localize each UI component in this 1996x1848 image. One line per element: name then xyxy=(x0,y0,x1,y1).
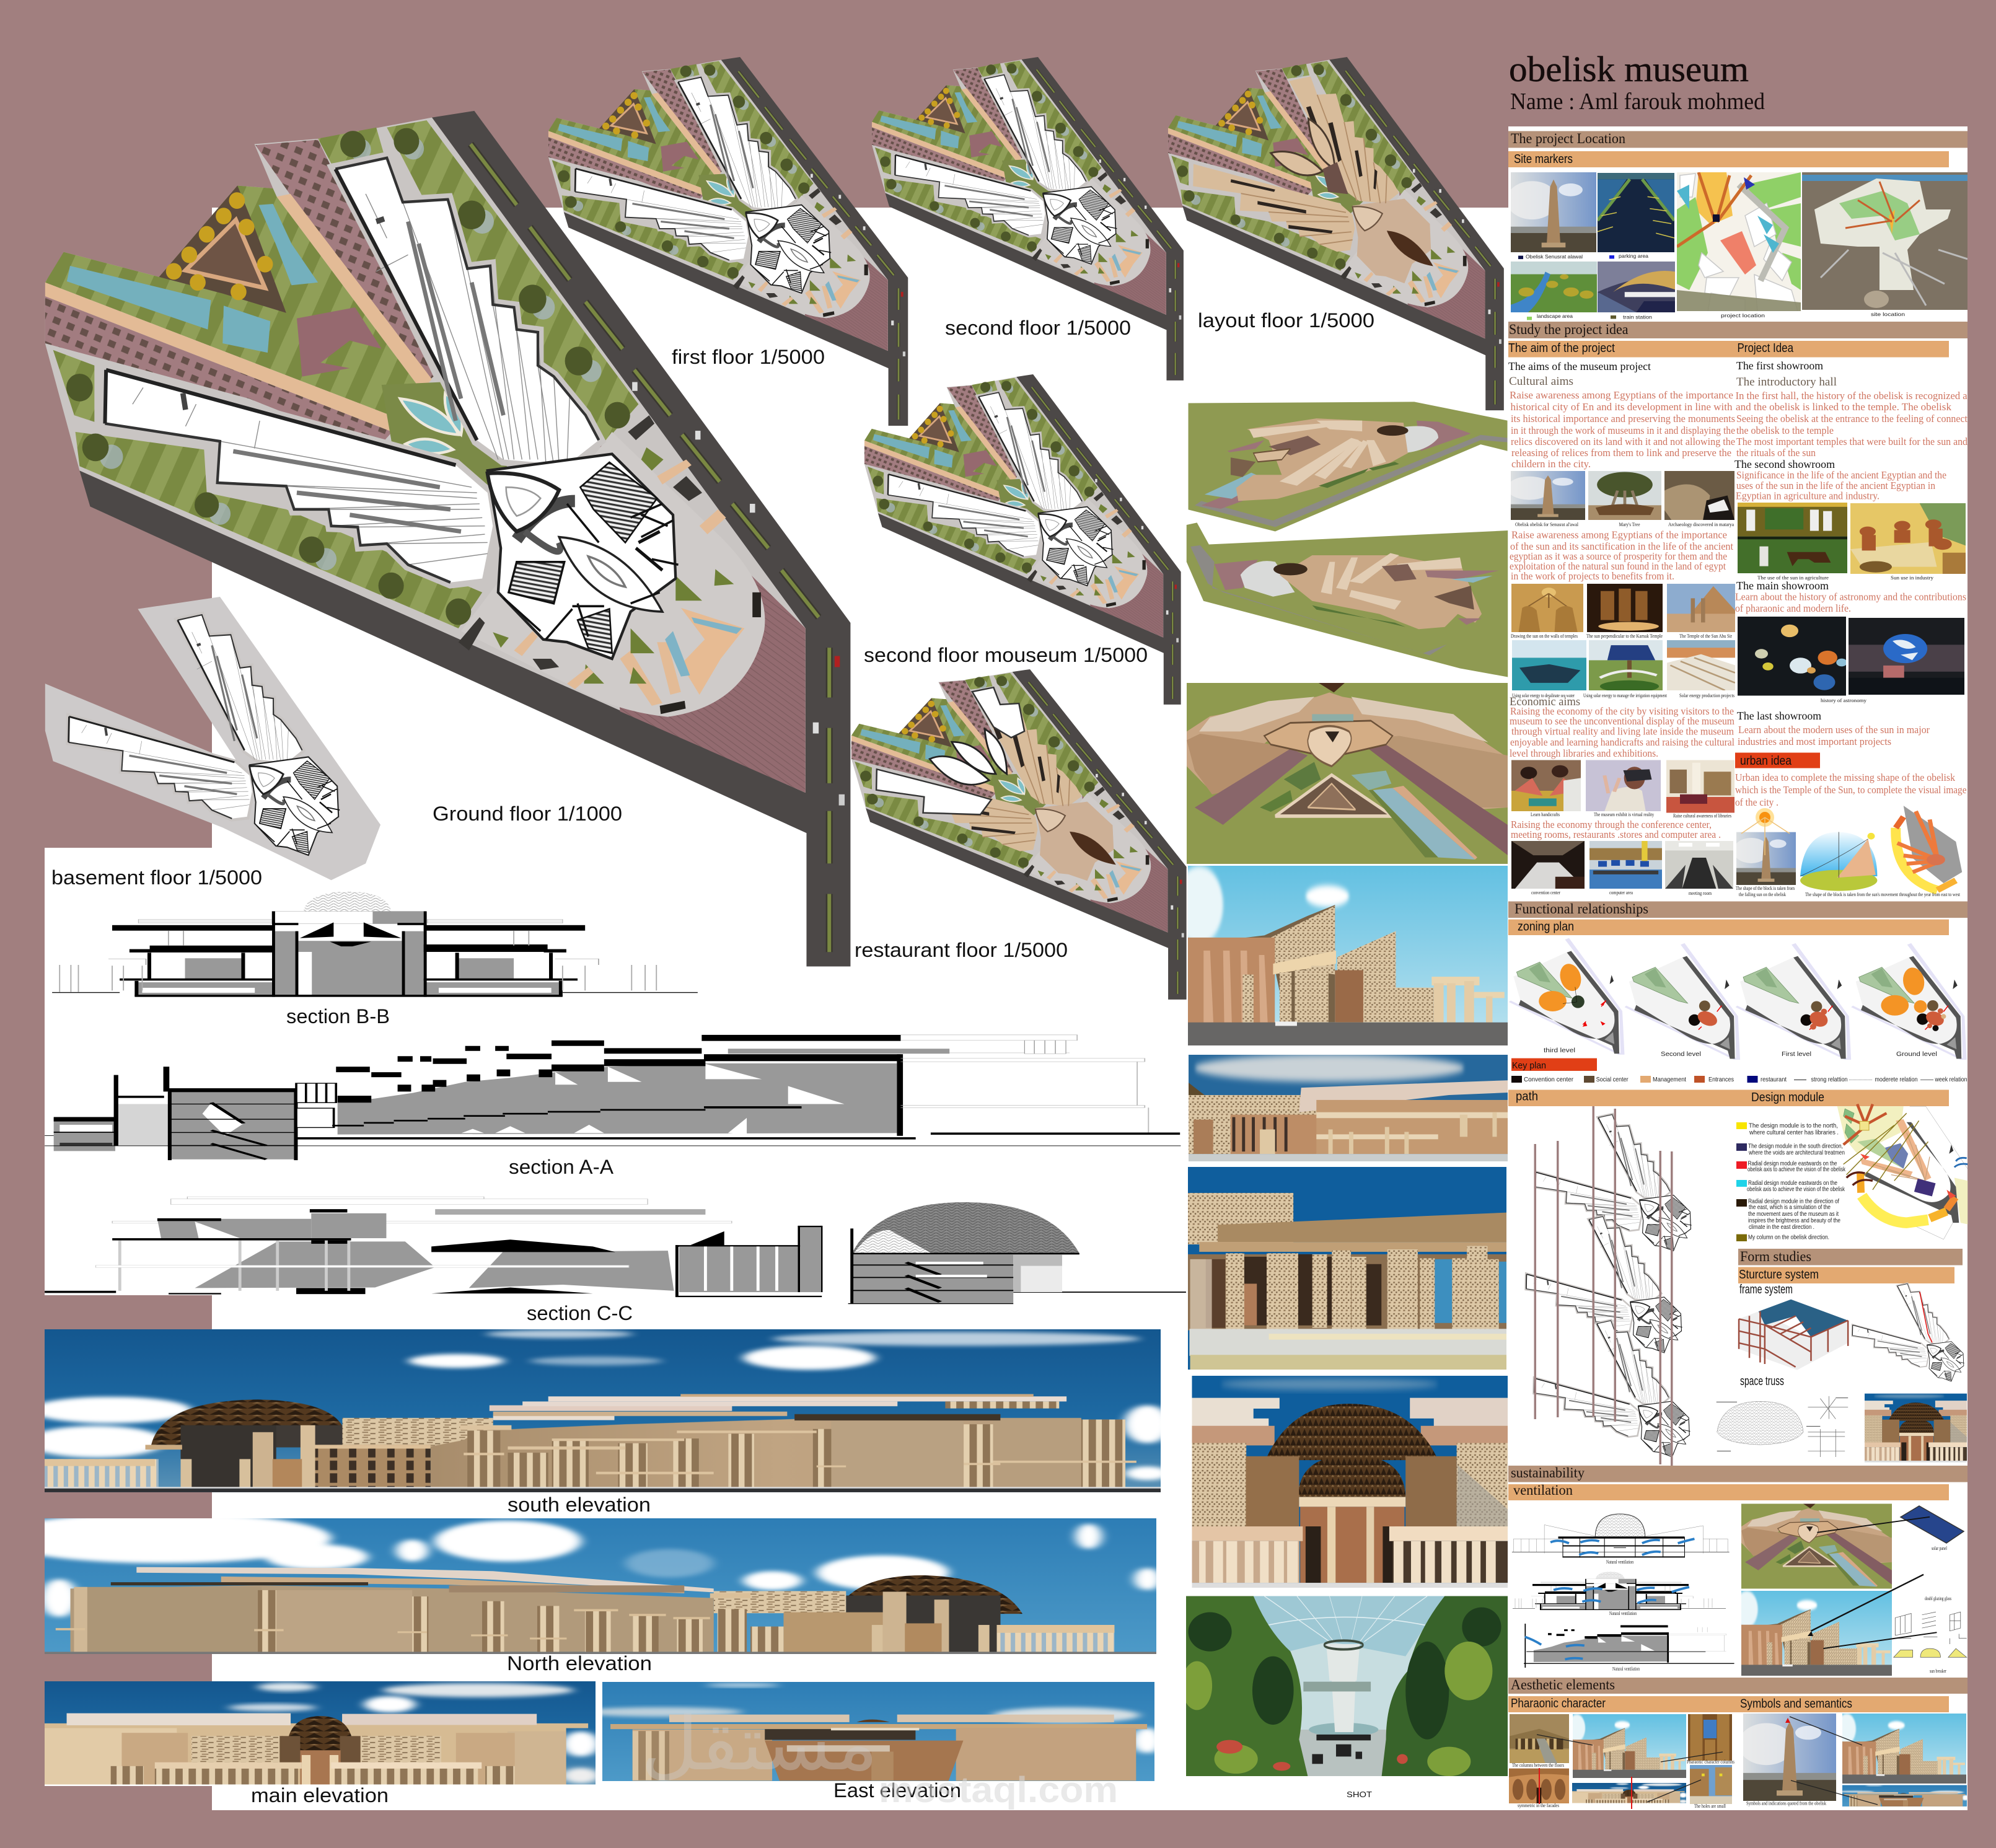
panel: functional relationships: Second level xyxy=(1661,1050,1701,1058)
shot: obelisk facade xyxy=(1176,866,1508,1045)
panel: study the project idea: The sun perpendicular to the Karnak Temple xyxy=(1586,633,1663,639)
panel: form studies: Form studies xyxy=(1740,1249,1811,1264)
panel: sustainability: Natural ventilation xyxy=(1606,1559,1634,1565)
south elevation xyxy=(45,1329,1161,1492)
panel: study the project idea: of pharaonic and modern life. xyxy=(1735,602,1851,614)
north elevation xyxy=(45,1518,1156,1654)
panel: study the project idea: level through libraries and exhibitions. xyxy=(1510,747,1658,759)
panel: study the project idea: The last showroom xyxy=(1737,710,1821,722)
panel: study the project idea: Urban idea to complete the missing shape of the obelisk xyxy=(1735,772,1955,783)
panel: form studies: frame system xyxy=(1739,1283,1793,1296)
shot: atrium with waterfall xyxy=(1186,1596,1508,1776)
panel: study the project idea: meeting rooms, restaurants .stores and computer area . xyxy=(1511,829,1721,840)
panel: study the project idea: Raise awareness among Egyptians of the importance xyxy=(1510,389,1733,401)
panel: project location xyxy=(1506,131,1967,320)
panel: study the project idea: the rituals of the sun xyxy=(1736,447,1816,459)
panel: study the project idea: The second showroom xyxy=(1734,458,1835,470)
east elevation xyxy=(581,1682,1162,1781)
panel: study the project idea: The most important temples that were built for the sun and xyxy=(1736,436,1967,447)
panel: study the project idea: which is the Temple of the Sun, to complete the visual image xyxy=(1735,784,1967,796)
panel: functional relationships: Key plan xyxy=(1512,1060,1546,1071)
panel: study the project idea: Egyptian in agriculture and industry. xyxy=(1736,490,1879,502)
author name: Name : Aml farouk mohmed xyxy=(1510,89,1765,115)
panel: functional relationships: week relation xyxy=(1935,1076,1967,1083)
panel: design module: where the voids are architectural treatmen xyxy=(1748,1149,1845,1156)
panel: sustainability: Natural ventilation xyxy=(1609,1610,1637,1616)
panel: study the project idea: The main showroom xyxy=(1736,579,1829,592)
label: east elevation: East elevation xyxy=(833,1779,961,1802)
section C-C drawing xyxy=(45,1197,1186,1304)
panel: aesthetic elements: The columns between the floors xyxy=(1512,1762,1564,1768)
panel: study the project idea: in the work of projects to benefits from it. xyxy=(1511,570,1674,582)
panel: study the project idea: The shape of the block is taken from xyxy=(1736,885,1795,891)
panel: aesthetic elements: Pharaonic character xyxy=(1511,1697,1606,1710)
panel: study the project idea: of the sun and its sanctification in the life of the ancient xyxy=(1510,540,1733,552)
panel: study the project idea: Solar energy production projects xyxy=(1679,692,1734,698)
panel: study the project idea: through virtual reality and living late inside the museum xyxy=(1511,725,1734,737)
panel: study the project idea: of the city . xyxy=(1735,796,1778,808)
panel: design module: the movement axes of the museum as it xyxy=(1748,1210,1839,1218)
panel: sustainability: doubl glazing glass xyxy=(1925,1595,1951,1601)
panel: study the project idea: industries and most important projects xyxy=(1738,736,1891,747)
panel: design module xyxy=(1736,1104,1967,1241)
panel: study the project idea: Drawing the sun on the walls of temples xyxy=(1511,633,1578,639)
panel: functional relationships: Functional relationships xyxy=(1515,901,1648,917)
plan: second floor museum xyxy=(864,374,1181,705)
label: section C-C: section C-C xyxy=(527,1302,633,1324)
panel: study the project idea: relics discovered on its land with it and not allowing the xyxy=(1511,436,1735,447)
panel: study the project idea: Sun use in industry xyxy=(1891,574,1934,581)
panel: study the project idea: museum to see the unconventional display of the museum xyxy=(1510,715,1734,727)
panel: functional relationships: Management xyxy=(1653,1076,1686,1083)
section B-B drawing xyxy=(52,892,698,997)
label: ground floor: Ground floor 1/1000 xyxy=(433,803,622,825)
panel: study the project idea: Seeing the obelisk at the entrance to the feeling of connect xyxy=(1736,413,1967,425)
panel: study the project idea: the obelisk to the temple xyxy=(1736,425,1834,436)
panel: study the project idea: urban idea xyxy=(1740,754,1792,768)
label: first floor: first floor 1/5000 xyxy=(672,346,825,368)
label: second floor: second floor 1/5000 xyxy=(945,317,1131,339)
panel: design module: Radial design module eastwards on the xyxy=(1748,1179,1837,1187)
watermark: مستقل xyxy=(641,1701,878,1787)
panel: functional relationships: path xyxy=(1516,1089,1538,1103)
aerial view 1 xyxy=(1189,402,1508,531)
panel: study the project idea: The first showroom xyxy=(1736,359,1823,372)
panel: functional relationships: Social center xyxy=(1596,1076,1629,1083)
panel: sustainability: sustainability xyxy=(1511,1465,1585,1481)
watermark xyxy=(641,1701,1118,1810)
panel: study the project idea: the falling sun on the obelisk xyxy=(1739,891,1787,897)
panel: aesthetic elements: Pharaonic character columns xyxy=(1687,1759,1734,1765)
panel: project location: Obelisk Senusrat alawal xyxy=(1526,253,1583,260)
panel: study the project idea: computer area xyxy=(1609,889,1633,895)
panel: sustainability xyxy=(1508,1465,1967,1676)
label: shot: SHOT xyxy=(1347,1790,1372,1799)
panel: sustainability: ventilation xyxy=(1513,1482,1573,1498)
panel: functional relationships: First level xyxy=(1782,1050,1811,1058)
panel: study the project idea: Raising the economy of the city by visiting visitors to the xyxy=(1510,705,1734,717)
panel: design module: Radial design module eastwards on the xyxy=(1748,1160,1837,1168)
panel: design module: obelisk axis to achieve the vision of the obelisk xyxy=(1747,1186,1845,1193)
panel: sustainability: Natural ventilation xyxy=(1612,1666,1640,1672)
panel: study the project idea: Project Idea xyxy=(1738,341,1794,355)
shot: dome entrance xyxy=(1192,1376,1508,1588)
panel: study the project idea: The use of the sun in agriculture xyxy=(1757,574,1829,581)
panel: functional relationships: Ground level xyxy=(1896,1050,1937,1058)
panel: design module: the east, which is a simulation of the xyxy=(1749,1203,1831,1211)
panel: study the project idea: exploitation of the natural sun found in the land of egypt xyxy=(1510,560,1726,572)
panel: design module: where cultural center has libraries . xyxy=(1749,1129,1839,1137)
panel: design module: climate in the east direction . xyxy=(1749,1223,1814,1231)
panel: design module: My column on the obelisk direction. xyxy=(1748,1233,1829,1241)
panel: study the project idea: in it through the work of museums in it and displaying the xyxy=(1511,425,1735,436)
panel: study the project idea: Using solar energy to manage the irrigation equipment xyxy=(1583,692,1667,698)
panel: aesthetic elements: Symbols and semantics xyxy=(1740,1697,1852,1710)
panel: study the project idea: Raise cultural awareness of libraries xyxy=(1673,812,1731,819)
panel: study the project idea: Obelisk obelisk for Senusrat al'awal xyxy=(1515,521,1579,527)
panel: form studies xyxy=(1717,1249,1967,1463)
panel: project location: parking area xyxy=(1619,253,1648,259)
shot: colonnade xyxy=(1188,1167,1506,1370)
perspective view xyxy=(1187,683,1508,864)
panel: functional relationships: moderete relation xyxy=(1875,1076,1918,1083)
panel: study the project idea xyxy=(1507,322,1967,897)
panel: study the project idea: The aims of the museum project xyxy=(1508,360,1651,372)
panel: study the project idea: Learn about the modern uses of the sun in major xyxy=(1738,724,1930,736)
panel: study the project idea: The aim of the project xyxy=(1508,341,1615,355)
panel: project location: Site markers xyxy=(1514,152,1573,166)
label: section A-A: section A-A xyxy=(509,1156,614,1178)
label: main elevation: main elevation xyxy=(251,1784,389,1806)
panel: project location: landscape area xyxy=(1537,313,1573,319)
panel: functional relationships: third level xyxy=(1544,1047,1575,1054)
panel: study the project idea: Study the project idea xyxy=(1509,322,1629,337)
panel: form studies: space truss xyxy=(1740,1375,1784,1388)
plan: first floor xyxy=(548,57,908,426)
panel: sustainability: solar panel xyxy=(1932,1545,1947,1551)
panel: functional relationships: Convention center xyxy=(1524,1076,1573,1083)
panel: sustainability: sun breaker xyxy=(1930,1668,1946,1674)
panel: study the project idea: Cultural aims xyxy=(1509,375,1573,388)
panel: functional relationships xyxy=(1508,901,1967,1106)
panel: study the project idea: In the first hall, the history of the obelisk is recognized a xyxy=(1736,390,1967,402)
plan: layout floor xyxy=(1168,57,1504,410)
panel: study the project idea: Significance in the life of the ancient Egyptian and the xyxy=(1736,469,1946,481)
panel: study the project idea: historical city of En and its development in line with xyxy=(1511,401,1733,413)
panel: study the project idea: enjoyable and learning handicrafts and raising the cultural xyxy=(1510,736,1734,748)
panel: study the project idea: The Temple of the Sun Abu Sir xyxy=(1679,633,1732,639)
panel: project location: site location xyxy=(1871,311,1905,317)
label: layout floor: layout floor 1/5000 xyxy=(1198,309,1374,332)
panel: study the project idea: its historical importance and preserving the monuments xyxy=(1511,413,1735,425)
panel: study the project idea: Economic aims xyxy=(1510,695,1580,708)
plan: restaurant floor xyxy=(851,669,1187,1000)
label: basement floor: basement floor 1/5000 xyxy=(51,866,262,889)
panel: study the project idea: Raise awareness among Egyptians of the importance xyxy=(1511,529,1727,540)
aerial view 2 xyxy=(1187,522,1508,677)
panel: study the project idea: childern in the city. xyxy=(1511,458,1591,470)
panel: study the project idea: meeting room xyxy=(1689,890,1712,896)
panel: study the project idea: Learn about the history of astronomy and the contributions xyxy=(1735,591,1966,602)
panel: functional relationships: Entrances xyxy=(1708,1076,1734,1083)
panel: design module: The design module in the south direction, xyxy=(1748,1143,1843,1150)
main elevation xyxy=(45,1681,599,1786)
panel: study the project idea: egyptian as it was a source of prosperity for them and the xyxy=(1510,550,1727,562)
panel: study the project idea: The introductory hall xyxy=(1736,376,1837,389)
panel: study the project idea: The museum exhibit is virtual reality xyxy=(1594,811,1655,817)
panel: form studies: Sturcture system xyxy=(1739,1268,1819,1282)
section A-A drawing xyxy=(45,1035,1180,1160)
panel: study the project idea: history of astronomy xyxy=(1821,697,1867,703)
panel: functional relationships: restaurant xyxy=(1761,1076,1787,1083)
plan: ground floor xyxy=(45,111,850,967)
panel: study the project idea: Mary's Tree xyxy=(1619,521,1640,527)
panel: aesthetic elements: Aesthetic elements xyxy=(1511,1677,1615,1692)
title: obelisk museum xyxy=(1509,49,1749,89)
panel: project location: The project Location xyxy=(1511,131,1625,146)
panel: functional relationships: Design module xyxy=(1751,1091,1824,1104)
plan: second floor xyxy=(872,57,1184,381)
panel: project location: train station xyxy=(1623,314,1652,320)
panel: study the project idea: Raising the economy through the conference center, xyxy=(1511,819,1712,830)
panel: design module: obelisk axis to achieve the vision of the obelisk xyxy=(1748,1166,1846,1173)
label: south elevation: south elevation xyxy=(508,1494,651,1516)
panel: study the project idea: and the obelisk is linked to the temple. The obelisk xyxy=(1736,401,1952,413)
panel: study the project idea: Archaeology discovered in matarya xyxy=(1668,521,1734,527)
panel: design module: The design module is to the north, xyxy=(1749,1122,1838,1129)
panel: aesthetic elements: symmetric in the facades xyxy=(1518,1802,1559,1808)
panel: aesthetic elements: The holes are small xyxy=(1694,1803,1726,1809)
panel: study the project idea: Learn handicrafts xyxy=(1531,811,1560,817)
panel: study the project idea: releasing of relices from them to link and preserve the xyxy=(1511,447,1731,459)
diagram: circulation path xyxy=(1526,1106,1692,1466)
panel: aesthetic elements xyxy=(1508,1677,1969,1809)
panel: design module: Radial design module in the direction of xyxy=(1748,1198,1839,1205)
panel: study the project idea: uses of the sun in the life of the ancient Egyptian in xyxy=(1736,480,1935,491)
label: section B-B: section B-B xyxy=(286,1005,390,1027)
panel: aesthetic elements: Symbols and indications quoted from the obelisk xyxy=(1746,1800,1827,1806)
shot: colonnade strip xyxy=(1189,1055,1508,1161)
panel: functional relationships: zoning plan xyxy=(1518,920,1574,933)
panel: project location: project location xyxy=(1721,312,1765,319)
panel: study the project idea: Using solar energy to desalinate sea water xyxy=(1512,692,1575,698)
panel: study the project idea: convention center xyxy=(1531,889,1560,895)
label: restaurant floor: restaurant floor 1/5000 xyxy=(855,939,1068,961)
plan: basement floor xyxy=(45,597,380,880)
panel: functional relationships: strong relattion xyxy=(1811,1076,1848,1083)
label: north elevation: North elevation xyxy=(507,1652,652,1674)
watermark: mostaql.com xyxy=(879,1770,1118,1810)
panel: design module: inspires the brightness and beauty of the xyxy=(1748,1217,1840,1225)
label: second floor museum: second floor mouseum 1/5000 xyxy=(864,644,1148,666)
